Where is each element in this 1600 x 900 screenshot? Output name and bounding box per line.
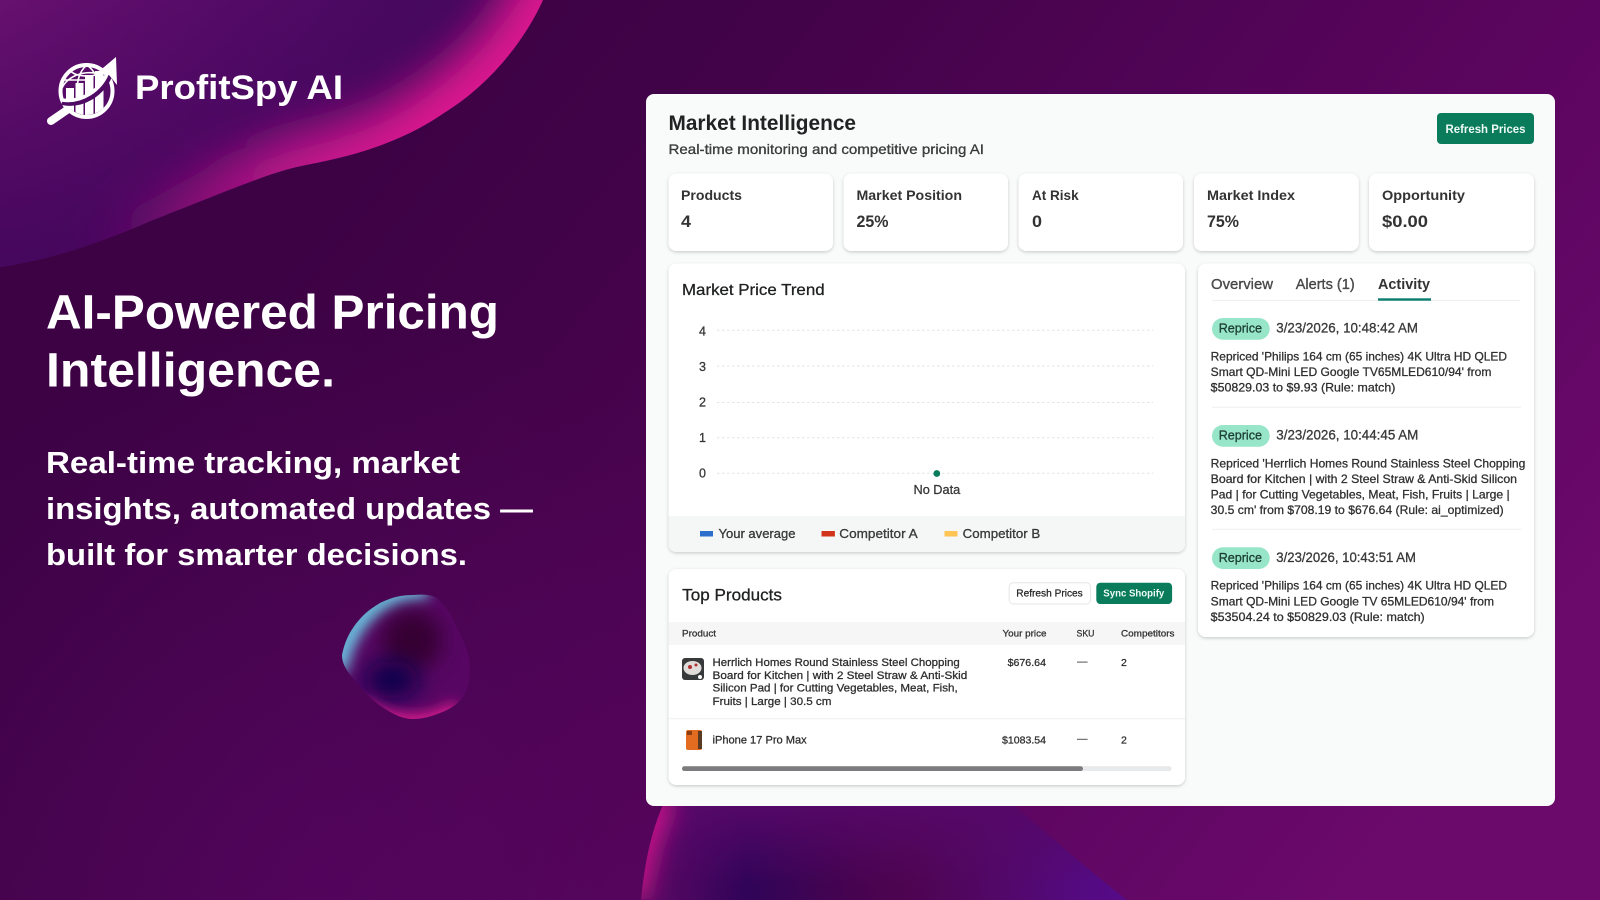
KPI card: market index <box>1194 174 1359 251</box>
tabs: Activity <box>1378 277 1430 293</box>
line chart: 0 <box>699 466 706 480</box>
activity item 3 <box>1211 547 1507 624</box>
chart title: Market Price Trend <box>682 282 825 299</box>
table scrollbar <box>682 766 1172 771</box>
line chart: 4 <box>699 324 706 338</box>
activity item 2 <box>1211 425 1525 517</box>
button: refresh prices: Refresh Prices <box>1446 122 1526 136</box>
panel: market price trend chart <box>668 264 1185 552</box>
decorative blob: small sphere <box>342 594 470 719</box>
activity item 2: Board for Kitchen | with 2 Steel Straw & Anti-Skid Silicon <box>1211 472 1517 486</box>
KPI card: opportunity: $0.00 <box>1382 213 1428 231</box>
table row: Herrlich chopping board <box>682 657 1127 708</box>
table row: Herrlich chopping board: Silicon Pad | for Cutting Vegetables, Meat, Fish, <box>712 683 958 695</box>
KPI card: opportunity: Opportunity <box>1382 187 1465 203</box>
KPI card: at risk: At Risk <box>1032 187 1079 203</box>
table row: Herrlich chopping board: Herrlich Homes Round Stainless Steel Chopping <box>712 657 960 669</box>
tabs <box>1211 277 1520 301</box>
product thumbnail: iPhone <box>686 730 702 750</box>
table header row: SKU <box>1076 629 1095 640</box>
chart legend <box>700 526 1040 541</box>
KPI card: at risk: 0 <box>1032 213 1042 231</box>
decorative blob: bottom centre <box>641 806 1127 900</box>
tabs: Overview <box>1211 277 1274 293</box>
chart legend: Competitor A <box>839 526 918 541</box>
subheading: built for smarter decisions. <box>46 537 467 572</box>
table row: Herrlich chopping board: 2 <box>1121 657 1127 669</box>
KPI card: market position: 25% <box>856 213 889 231</box>
line chart: 1 <box>699 431 706 445</box>
table row: Herrlich chopping board: $676.64 <box>1008 657 1046 669</box>
button: refresh prices secondary: Refresh Prices <box>1016 589 1083 600</box>
table row: Herrlich chopping board: Board for Kitchen | with 2 Steel Straw & Anti-Skid <box>712 670 967 682</box>
brand name: ProfitSpy AI <box>135 69 343 107</box>
button: refresh prices secondary <box>1009 583 1090 604</box>
KPI card: products <box>668 174 833 251</box>
KPI card: opportunity <box>1369 174 1534 251</box>
KPI card: products: Products <box>681 187 742 203</box>
activity item 1: Repriced 'Philips 164 cm (65 inches) 4K Ultra HD QLED <box>1211 349 1507 363</box>
tabs: Alerts (1) <box>1296 277 1355 293</box>
activity item 1 <box>1211 318 1507 395</box>
line chart: 2 <box>699 396 706 410</box>
line chart <box>699 324 1153 497</box>
headline: Intelligence. <box>46 344 335 398</box>
activity item 1: $50829.03 to $9.93 (Rule: match) <box>1211 381 1395 395</box>
panel: activity feed <box>1198 264 1534 637</box>
table header row: Product <box>682 629 716 640</box>
subheading <box>46 445 533 572</box>
activity item 2: 30.5 cm' from $708.19 to $676.64 (Rule: ai_optimized) <box>1211 503 1504 517</box>
table row: Herrlich chopping board: Fruits | Large | 30.5 cm <box>712 696 831 708</box>
panel: top products table <box>668 569 1185 785</box>
activity item 3: $53504.24 to $50829.03 (Rule: match) <box>1211 610 1425 624</box>
logo: magnifier, globe and growth arrow icon <box>51 57 117 121</box>
decorative blob: top left <box>0 0 543 267</box>
KPI card: products: 4 <box>681 213 692 231</box>
button: sync shopify: Sync Shopify <box>1103 589 1165 600</box>
KPI card: at risk <box>1018 174 1183 251</box>
table header row <box>668 622 1185 645</box>
chart legend: Your average <box>718 526 796 541</box>
headline: AI-Powered Pricing <box>46 286 499 340</box>
dashboard title: Market Intelligence <box>668 112 856 135</box>
activity item 1: Reprice <box>1219 320 1262 335</box>
activity item 3: Reprice <box>1219 550 1262 565</box>
table header row: Your price <box>1002 629 1046 640</box>
subheading: Real-time tracking, market <box>46 445 460 480</box>
KPI card: market position: Market Position <box>856 187 962 203</box>
line chart: 3 <box>699 360 706 374</box>
table header row: Competitors <box>1121 629 1175 640</box>
headline <box>46 286 499 398</box>
chart legend: Competitor B <box>963 526 1040 541</box>
activity item 1: 3/23/2026, 10:48:42 AM <box>1276 320 1418 335</box>
button: refresh prices <box>1437 113 1534 144</box>
table row: iPhone 17 Pro Max <box>686 730 1127 750</box>
button: sync shopify <box>1096 583 1172 604</box>
activity item 2: Repriced 'Herrlich Homes Round Stainless Steel Chopping <box>1211 456 1525 470</box>
activity item 1: Smart QD-Mini LED Google TV65MLED610/94' from <box>1211 365 1492 379</box>
activity item 3: Smart QD-Mini LED Google TV 65MLED610/94' from <box>1211 594 1494 608</box>
panel: market intelligence dashboard <box>646 94 1555 806</box>
activity item 2: Pad | for Cutting Vegetables, Meat, Fish, Fruits | Large | <box>1211 488 1510 502</box>
product thumbnail: chopping board <box>682 658 704 680</box>
table row: iPhone 17 Pro Max: 2 <box>1121 735 1127 747</box>
table row: iPhone 17 Pro Max: iPhone 17 Pro Max <box>712 734 807 746</box>
activity item 3: Repriced 'Philips 164 cm (65 inches) 4K Ultra HD QLED <box>1211 579 1507 593</box>
table row: iPhone 17 Pro Max: $1083.54 <box>1002 735 1046 747</box>
KPI card: market position <box>844 174 1008 251</box>
table title: Top Products <box>682 586 782 605</box>
KPI card: market index: 75% <box>1207 213 1239 231</box>
activity item 2: 3/23/2026, 10:44:45 AM <box>1276 427 1418 442</box>
subheading: insights, automated updates — <box>46 491 533 526</box>
activity item 2: Reprice <box>1219 427 1262 442</box>
activity item 3: 3/23/2026, 10:43:51 AM <box>1276 550 1416 565</box>
KPI card: market index: Market Index <box>1207 187 1295 203</box>
line chart: No Data <box>914 482 961 497</box>
dashboard subtitle: Real-time monitoring and competitive pricing AI <box>668 141 984 157</box>
